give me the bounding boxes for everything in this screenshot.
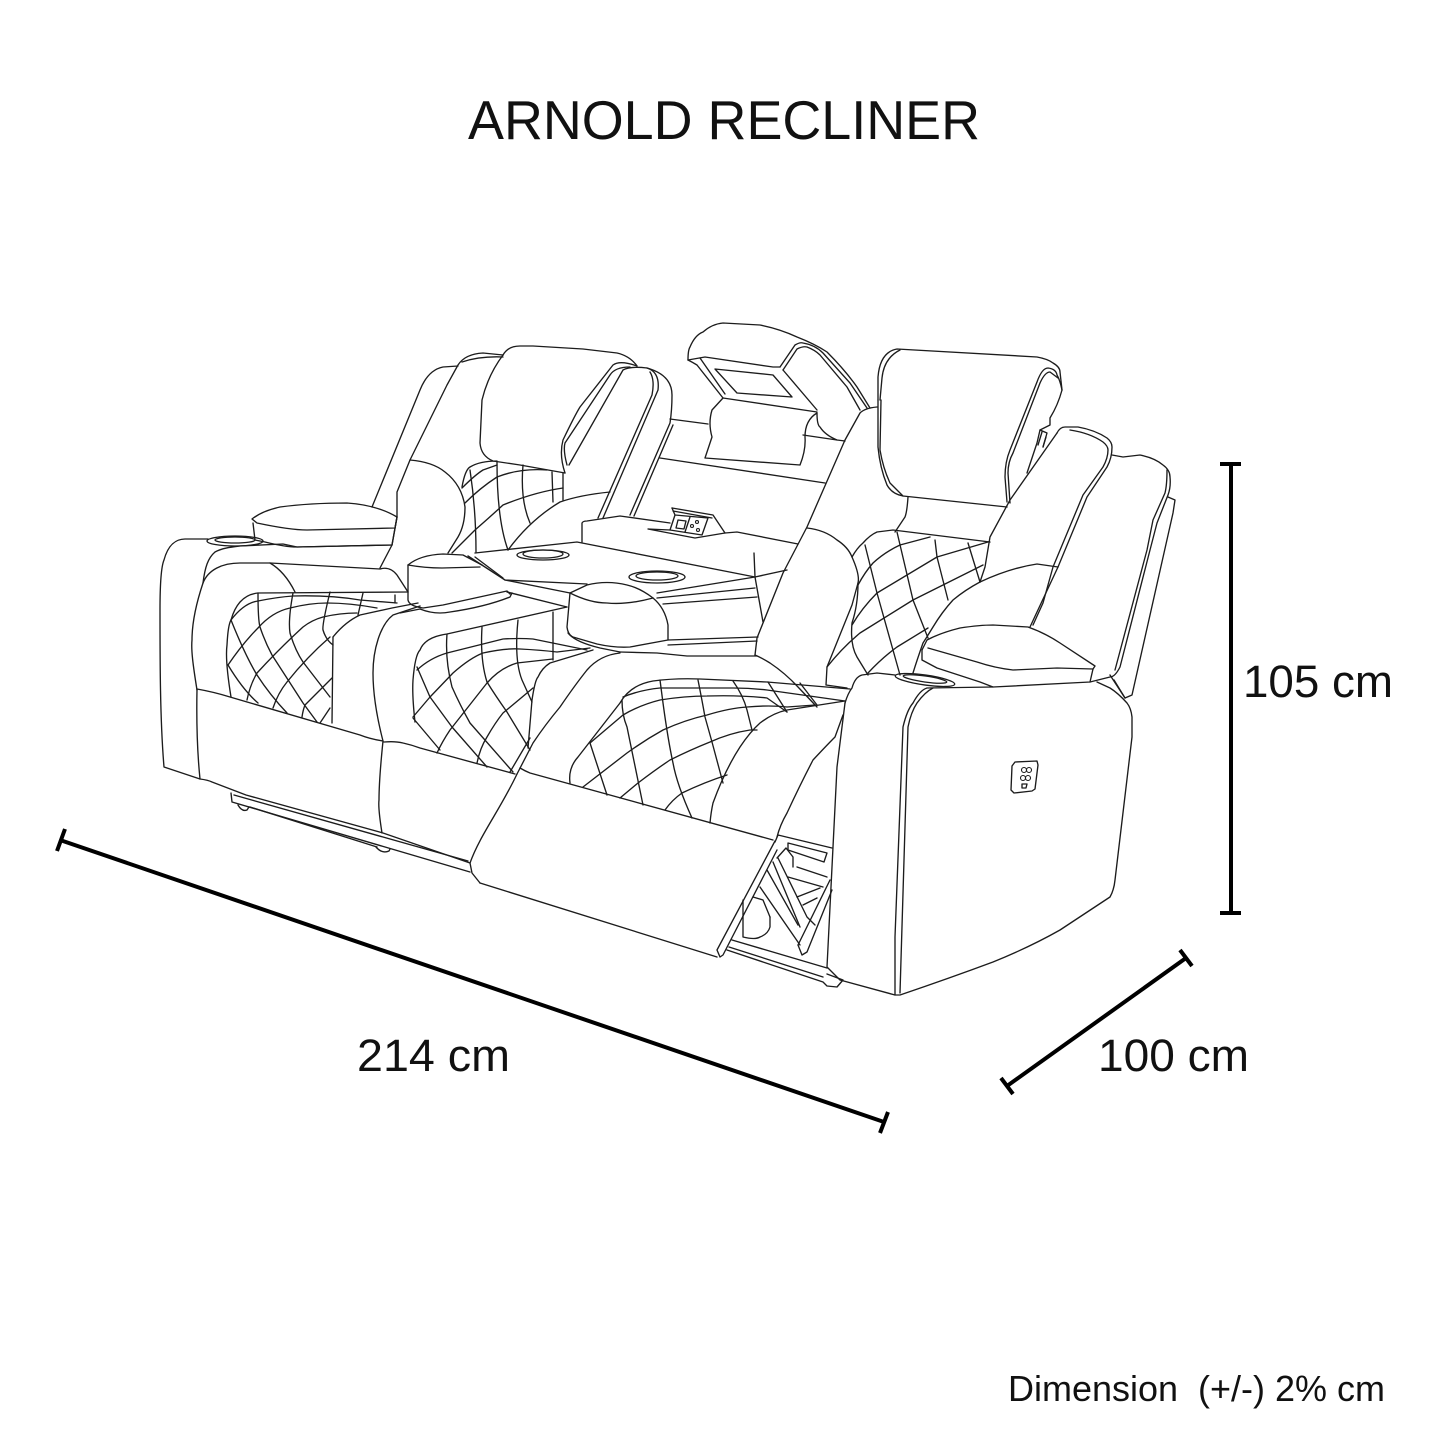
centre console (468, 516, 798, 656)
right arm front with cup holder and remote (827, 671, 1132, 995)
right back quilting (827, 497, 990, 675)
middle seat quilting (413, 607, 620, 883)
left back and headrest (372, 346, 637, 568)
left back quilting (452, 461, 610, 553)
centre wing panel (569, 367, 825, 518)
label: width: 214 cm (357, 1030, 510, 1081)
flip-up centre headrest (688, 323, 870, 465)
right headrest (878, 349, 1062, 507)
right back panel and wing (913, 427, 1175, 698)
title: ARNOLD RECLINER (468, 89, 980, 151)
left seat: arm and base (160, 539, 515, 872)
dimension: width bracket (57, 829, 888, 1133)
extended footrest and right cushion (480, 701, 845, 957)
centre armrests (400, 554, 668, 652)
right arm pillow (922, 625, 1095, 687)
right seat quilting (570, 679, 850, 818)
left seat quilting (226, 592, 420, 741)
illustration: recliner sofa line drawing (160, 323, 1175, 995)
power outlet panel (670, 508, 725, 535)
dimension: height bracket (1220, 464, 1241, 913)
label: depth: 100 cm (1098, 1030, 1249, 1081)
icon: recliner control button (1011, 761, 1038, 793)
left arm pillow and cup holder (207, 503, 397, 547)
note: dimension tolerance: Dimension (+/-) 2% cm (1008, 1368, 1385, 1409)
label: height: 105 cm (1243, 656, 1393, 707)
reclining mechanism (727, 835, 843, 987)
dimension: depth bracket (1001, 950, 1192, 1094)
centre recliner column (755, 407, 877, 707)
